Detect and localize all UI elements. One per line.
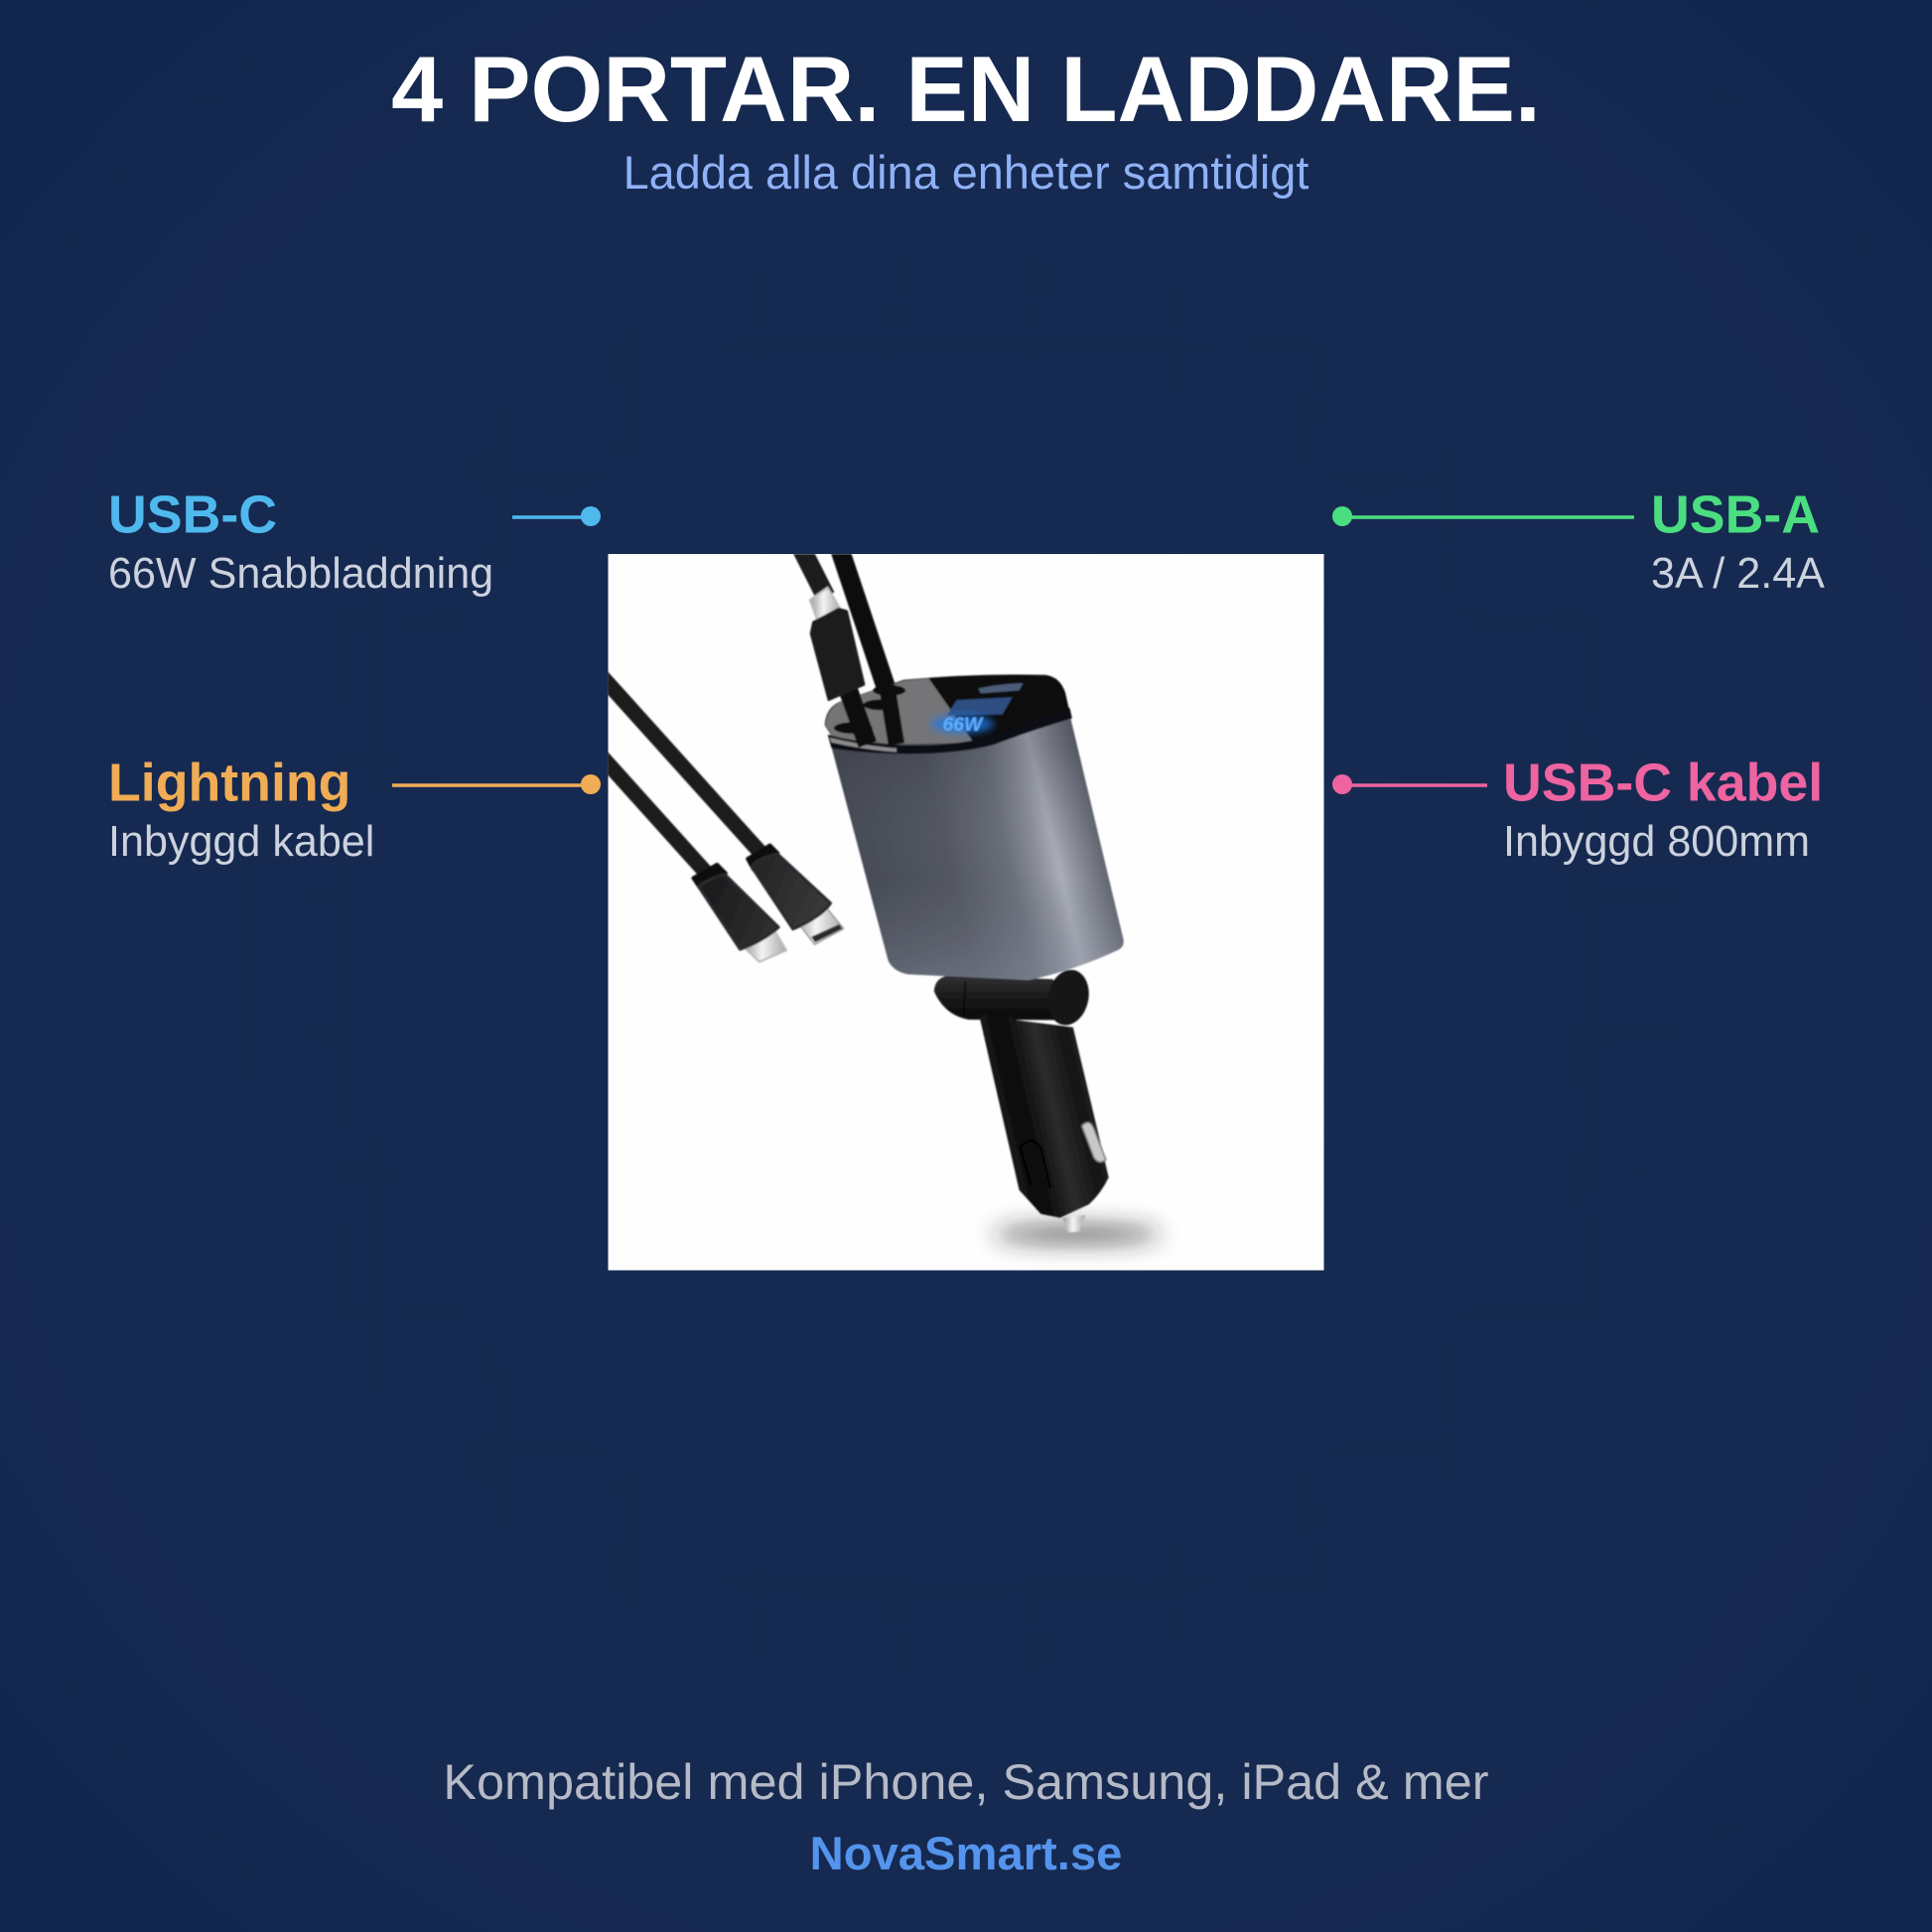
charger swivel joint bbox=[934, 975, 1072, 1020]
plug bbox=[980, 966, 1109, 1232]
product image panel bbox=[601, 546, 1324, 1271]
LED display: 66W bbox=[942, 714, 984, 736]
ground shadow bbox=[993, 1225, 1162, 1243]
title: 4 PORTAR. EN LADDARE. bbox=[391, 37, 1541, 141]
label: Lightning bbox=[108, 753, 374, 866]
subtitle: Ladda alla dina enheter samtidigt bbox=[623, 147, 1309, 199]
retracted cables bbox=[848, 686, 897, 745]
left cables bbox=[601, 675, 761, 876]
LED display bbox=[930, 714, 994, 736]
cable slots bbox=[834, 685, 905, 734]
hanging Lightning connector bbox=[810, 588, 864, 700]
label: USB-C kabel: USB-C kabel bbox=[1503, 753, 1823, 812]
top face bbox=[825, 674, 1072, 754]
USB-C connector bbox=[748, 846, 844, 944]
label: USB-C: USB-C bbox=[108, 484, 277, 544]
connector: USB-A bbox=[1332, 506, 1634, 526]
label: Lightning: Lightning bbox=[108, 753, 350, 812]
charger body bbox=[831, 715, 1124, 980]
label: USB-A bbox=[1651, 484, 1825, 598]
label: USB-C: 66W Snabbladdning bbox=[108, 550, 493, 598]
connector: Lightning bbox=[392, 774, 601, 794]
label: Lightning: Inbyggd kabel bbox=[108, 818, 374, 866]
footer compatibility text: Kompatibel med iPhone, Samsung, iPad & mer bbox=[443, 1753, 1489, 1810]
connector: USB-C bbox=[512, 506, 601, 526]
footer brand: NovaSmart.se bbox=[810, 1828, 1122, 1880]
label: USB-C kabel: Inbyggd 800mm bbox=[1503, 818, 1810, 866]
Lightning connector bbox=[693, 865, 786, 962]
top cables bbox=[800, 546, 891, 700]
USB ports bbox=[947, 683, 1023, 716]
label: USB-A: USB-A bbox=[1651, 484, 1820, 544]
label: USB-C kabel bbox=[1503, 753, 1823, 866]
connector: USB-C kabel bbox=[1332, 774, 1487, 794]
label: USB-A: 3A / 2.4A bbox=[1651, 550, 1825, 598]
label: USB-C bbox=[108, 484, 493, 598]
